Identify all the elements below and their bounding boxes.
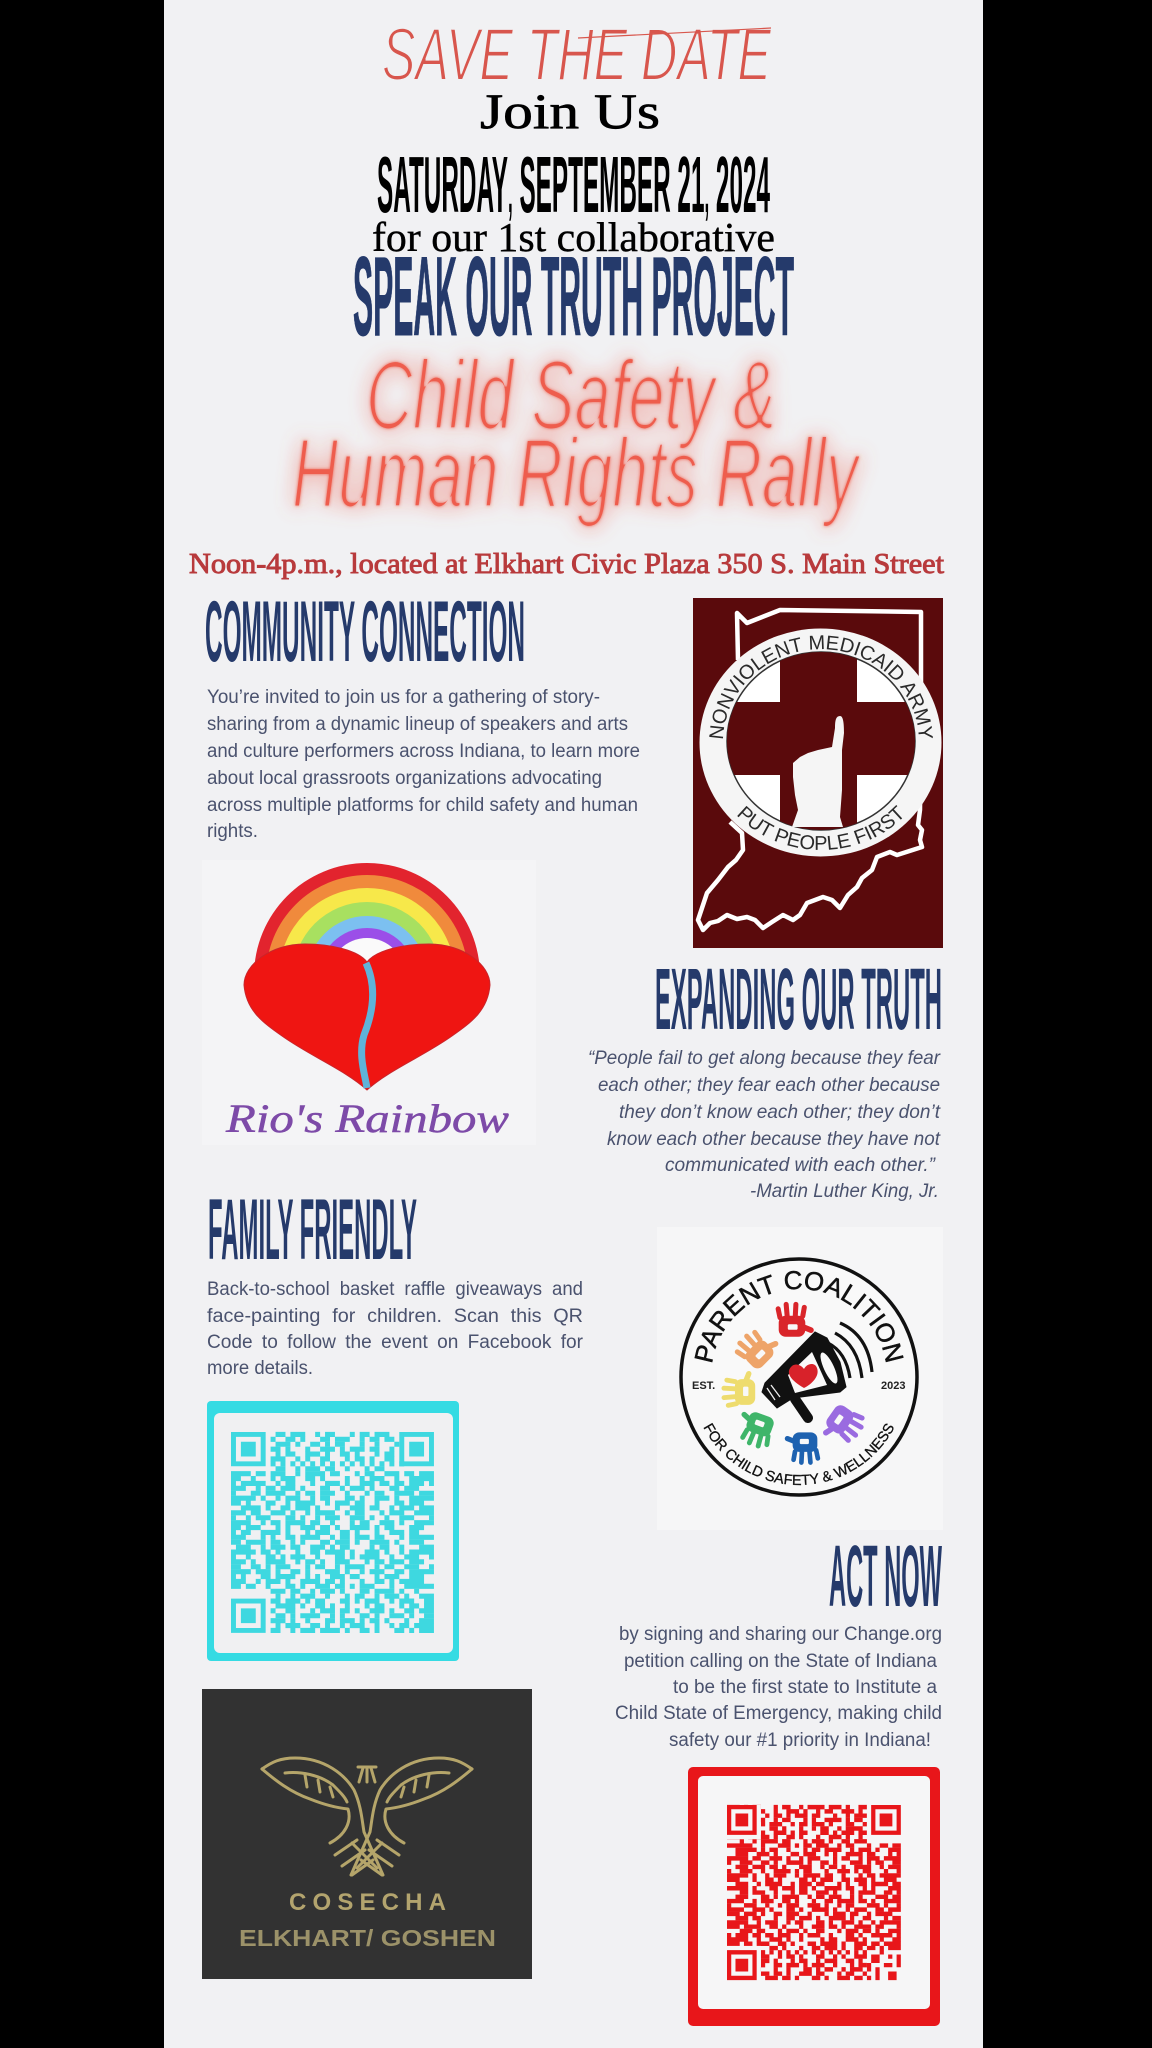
section: act now	[615, 1528, 942, 1751]
badge circle	[681, 1259, 917, 1495]
family friendly paragraph: more details.	[207, 1358, 313, 1379]
community paragraph: across multiple platforms for child safety and human	[207, 795, 638, 816]
martin luther king quote	[588, 1048, 941, 1202]
family friendly paragraph: Code to follow the event on Facebook for	[207, 1332, 584, 1353]
ring text bottom: PUT PEOPLE FIRST	[737, 805, 902, 850]
elkhart goshen wordmark: ELKHART/ GOSHEN	[239, 1925, 496, 1951]
logo: nonviolent medicaid army	[693, 598, 943, 948]
ring	[700, 628, 942, 856]
logo: cosecha elkhart goshen	[202, 1689, 532, 1979]
heading: join us: Join Us	[480, 83, 660, 139]
martin luther king quote: each other; they fear each other because	[598, 1075, 940, 1096]
cosecha wordmark: COSECHA	[289, 1889, 446, 1916]
community paragraph: sharing from a dynamic lineup of speakers and arts	[207, 714, 628, 735]
rainbow	[254, 863, 480, 962]
date: SATURDAY, SEPTEMBER 21, 2024	[377, 140, 770, 229]
petition paragraph: to be the first state to Institute a	[673, 1677, 937, 1698]
logo: rio's rainbow	[225, 863, 509, 1133]
location line: Noon-4p.m., located at Elkhart Civic Plaza 350 S. Main Street	[189, 549, 944, 580]
petition paragraph: petition calling on the State of Indiana	[624, 1651, 937, 1672]
family friendly paragraph: Back-to-school basket raffle giveaways and	[207, 1279, 583, 1300]
header: save the date	[382, 13, 772, 96]
qr code: change.org petition	[688, 1767, 940, 2026]
section: family friendly	[207, 1182, 584, 1379]
header: save the date: SAVE THE DATE	[382, 13, 772, 96]
petition paragraph	[615, 1624, 942, 1751]
section: expanding our truth	[588, 951, 942, 1202]
badge subtitle: FOR CHILD SAFETY & WELLNESS	[704, 1422, 894, 1486]
coloured hands	[721, 1302, 870, 1465]
petition paragraph: by signing and sharing our Change.org	[619, 1624, 942, 1645]
ring text top: NONVIOLENT MEDICAID ARMY	[709, 635, 933, 738]
community paragraph	[207, 687, 640, 842]
family friendly paragraph	[207, 1279, 584, 1379]
community paragraph: about local grassroots organizations advocating	[207, 768, 602, 789]
bird emblem	[262, 1758, 472, 1875]
rally title with glow	[292, 340, 861, 528]
martin luther king quote: they don’t know each other; they don’t	[619, 1102, 941, 1123]
raised hand	[792, 716, 844, 827]
martin luther king quote: “People fail to get along because they fear	[588, 1048, 941, 1069]
rally title with glow: Child Safety &	[366, 340, 776, 450]
badge title: PARENT COALITION	[694, 1270, 904, 1362]
martin luther king quote: know each other because they have not	[607, 1129, 941, 1150]
est label: EST.	[692, 1380, 715, 1392]
main flyer panel	[164, 0, 983, 2048]
community paragraph: You’re invited to join us for a gathering of story-	[207, 687, 600, 708]
martin luther king quote: communicated with each other.”	[665, 1155, 937, 1176]
text: FAMILY FRIENDLY	[208, 1182, 417, 1278]
section: community connection	[205, 584, 640, 842]
community paragraph: rights.	[207, 821, 258, 842]
year label: 2023	[881, 1380, 905, 1392]
rio's rainbow wordmark: Rio's Rainbow	[225, 1096, 509, 1141]
text: for our 1st collaborative: for our 1st collaborative	[372, 214, 775, 260]
rally title with glow: Human Rights Rally	[292, 418, 861, 528]
martin luther king quote: -Martin Luther King, Jr.	[750, 1181, 939, 1202]
cross	[727, 652, 915, 830]
logo: parent coalition	[679, 1257, 919, 1497]
heart	[244, 944, 490, 1090]
petition paragraph: Child State of Emergency, making child	[615, 1703, 942, 1724]
megaphone	[762, 1323, 872, 1418]
family friendly paragraph: face-painting for children. Scan this QR	[207, 1306, 583, 1327]
river	[362, 963, 373, 1088]
petition paragraph: safety our #1 priority in Indiana!	[669, 1730, 931, 1751]
community paragraph: and culture performers across Indiana, to learn more	[207, 741, 640, 762]
qr code: facebook event	[207, 1401, 459, 1661]
indiana outline	[698, 610, 922, 930]
